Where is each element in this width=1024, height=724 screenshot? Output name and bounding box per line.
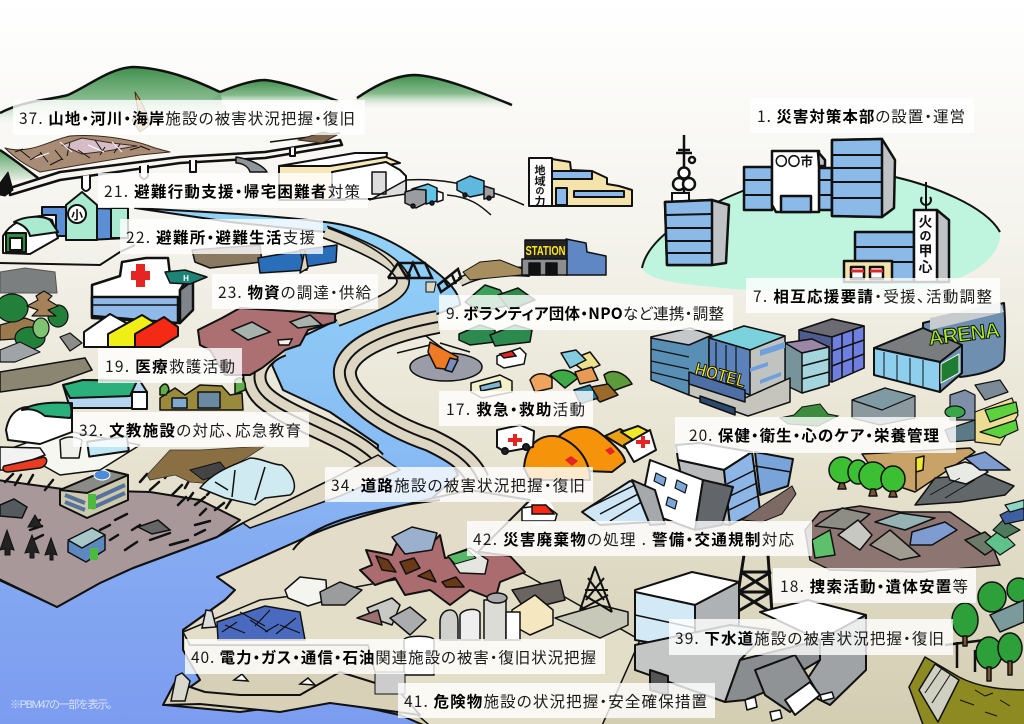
buses (471, 375, 512, 398)
fire station (844, 182, 949, 282)
helipad and helicopter (397, 336, 482, 381)
houses by 19 (160, 378, 245, 410)
arena (874, 302, 1005, 392)
landslide debris (5, 92, 337, 172)
label 7 (746, 278, 1000, 313)
wrecked roofs on mud (0, 499, 170, 534)
label 34 (325, 467, 593, 502)
label 23 (212, 274, 378, 309)
mint green city hall ground (642, 177, 1000, 290)
port land (183, 490, 530, 645)
temple and trees (0, 291, 82, 362)
lighthouse and buoys (171, 610, 315, 701)
river bridge (388, 263, 461, 292)
hotel group: HOTEL (693, 359, 748, 392)
damaged buildings centre (582, 443, 793, 530)
label 39 (669, 619, 953, 655)
city hall (744, 139, 895, 217)
building: chiiki no chikara: 地 (534, 162, 546, 178)
city hall: 〇〇市 (775, 151, 813, 170)
road band to river mouth (243, 455, 400, 528)
label 19: 19. 医療救護活動 (105, 355, 235, 377)
building: H hospital flooded (60, 470, 128, 518)
building: chiiki no chikara (529, 158, 632, 209)
label 23: 23. 物資の調達・供給 (218, 281, 371, 303)
school buildings and pool (12, 380, 147, 475)
flooded mud: left coast (0, 480, 240, 607)
dome gym (6, 403, 72, 444)
stone wall (0, 358, 92, 392)
fire station: 火 (918, 212, 932, 232)
rubble near the station (463, 260, 530, 280)
breakwater (163, 672, 420, 715)
label 37 (13, 100, 365, 135)
hotel group (651, 319, 864, 416)
school: elementary: 小 (71, 208, 83, 222)
footnote: ※PBM47の一部を表示。 (10, 698, 118, 711)
label 22: 22. 避難所・避難生活支援 (126, 226, 315, 248)
ambulance (497, 425, 534, 454)
label 17 (439, 391, 593, 426)
school: elementary (3, 192, 128, 254)
label 22 (120, 219, 323, 254)
lower harbour land (183, 560, 640, 724)
label 20 (675, 417, 956, 453)
trees and ground sign (829, 448, 975, 497)
harbour debris (222, 610, 300, 634)
water: river and sea (0, 208, 460, 724)
blue tarps (200, 458, 294, 505)
gray ruined houses (0, 268, 57, 293)
label 9 (439, 295, 733, 330)
rubble and blue warehouse (192, 245, 337, 273)
fire station: の (919, 227, 932, 244)
steel tower (735, 555, 772, 613)
fire station: 甲 (918, 241, 932, 261)
label 41: 41. 危険物施設の状況把握・安全確保措置 (404, 690, 707, 712)
park area (0, 245, 135, 265)
label 37: 37. 山地・河川・海岸施設の被害状況把握・復旧 (19, 107, 355, 129)
shelter houses: white yellow red (84, 314, 178, 347)
rubble on the right of building (742, 486, 796, 522)
label 21 (98, 173, 368, 208)
orange tents (524, 426, 656, 480)
harbour damage (217, 606, 305, 640)
label 41 (398, 683, 715, 718)
label 18: 18. 捜索活動・遺体安置等 (780, 575, 968, 597)
building: R flooded (68, 528, 105, 562)
building: chiiki no chikara: の (535, 184, 545, 197)
boats (0, 447, 47, 472)
collapsed houses cluster (805, 506, 1000, 572)
roads (254, 180, 530, 480)
label 1: 1. 災害対策本部の設置・運営 (757, 105, 965, 127)
neighbourhood houses (852, 380, 1018, 445)
damaged facility (635, 572, 866, 721)
label 42: 42. 災害廃棄物の処理 . 警備・交通規制対応 (473, 528, 794, 550)
port rubble and buildings (285, 577, 426, 635)
mountains (0, 67, 512, 182)
green tents (985, 500, 1024, 555)
pylon and platform (512, 567, 628, 638)
label 17: 17. 救急・救助活動 (446, 398, 585, 420)
colored tents (530, 350, 632, 404)
label 40: 40. 電力・ガス・通信・石油関連施設の被害・復旧状況把握 (191, 646, 596, 668)
factory building (279, 153, 406, 200)
label 39: 39. 下水道施設の被害状況把握・復旧 (675, 627, 944, 649)
label 32 (73, 412, 309, 447)
ambulance small (497, 348, 526, 368)
building: chiiki no chikara: 力 (534, 193, 546, 209)
label 7: 7. 相互応援要請・受援、活動調整 (753, 285, 992, 307)
wrecks in the mud (232, 315, 322, 345)
building: chiiki no chikara: 域 (534, 173, 546, 189)
mud: river bank (198, 308, 335, 375)
trucks (405, 176, 494, 208)
hospital (92, 258, 207, 323)
pine trees (0, 515, 57, 560)
collapsed house upper right (915, 452, 1014, 505)
building: station: STATION (526, 243, 566, 258)
label 42 (467, 521, 812, 556)
fire station: 心 (918, 257, 932, 277)
arena: ARENA (927, 319, 1001, 350)
hospital: H (183, 274, 189, 283)
building: station (522, 239, 606, 275)
expressway bridge (0, 133, 342, 196)
office tower (665, 200, 729, 265)
volunteer tents (459, 285, 535, 346)
mud with wrecked houses (360, 527, 525, 605)
torii, trees and stone wall (909, 578, 1024, 724)
label 32: 32. 文教施設の対応、応急教育 (79, 419, 301, 441)
antenna tower (672, 135, 695, 203)
label 40 (185, 639, 605, 674)
label 1 (750, 98, 974, 133)
damaged house above 20 (780, 404, 838, 426)
ambulance damaged (522, 498, 557, 526)
rubble: black wreck (190, 462, 228, 480)
label 9: 9. ボランティア団体・NPOなど連携・調整 (446, 302, 724, 324)
brown mud patch (147, 446, 265, 485)
factory tanks (375, 593, 520, 694)
label 21: 21. 避難行動支援・帰宅困難者対策 (104, 180, 360, 202)
port road (293, 500, 440, 550)
label 19 (98, 348, 242, 383)
label 34: 34. 道路施設の被害状況把握・復旧 (331, 474, 585, 496)
label 20: 20. 保健・衛生・心のケア・栄養管理 (689, 424, 939, 446)
debris strokes: left coast (5, 468, 231, 555)
label 18 (773, 568, 976, 603)
